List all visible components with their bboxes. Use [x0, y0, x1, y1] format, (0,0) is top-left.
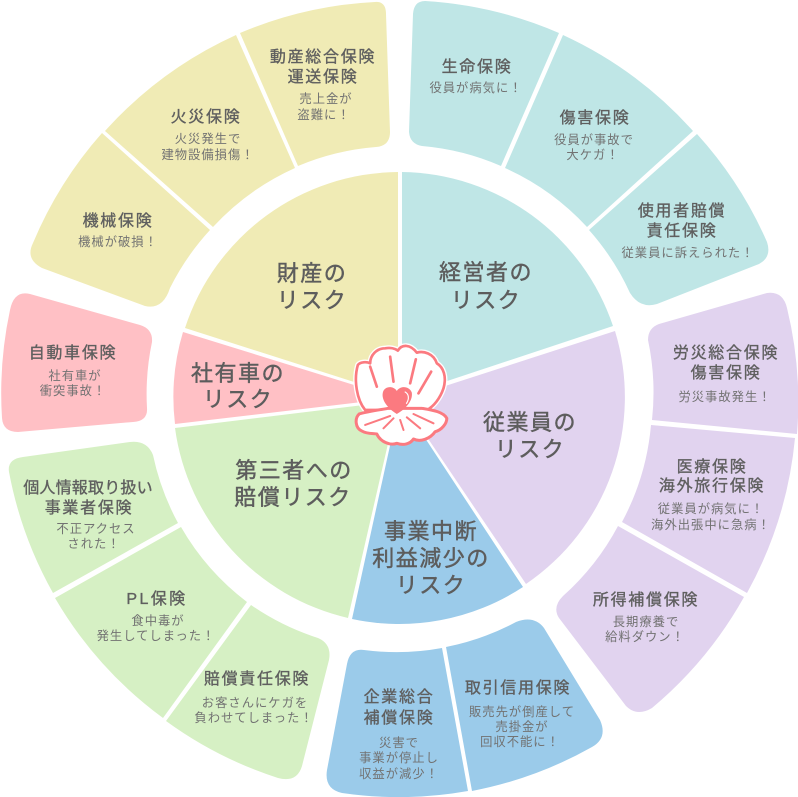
- panel: 医療保険・海外旅行保険: 従業員が病気に！: [658, 501, 764, 516]
- panel: 賠償責任保険: [166, 605, 330, 779]
- panel: 傷害保険: 傷害保険: [560, 108, 630, 126]
- panel: 所得補償保険: 長期療養で: [613, 614, 679, 629]
- segment: 従業員のリスク: リスク: [495, 436, 565, 462]
- panel: 企業総合補償保険: 災害で: [379, 735, 419, 750]
- panel: 個人情報取り扱い事業者保険: [9, 442, 178, 593]
- panel: 労災総合保険・傷害保険: 労災総合保険: [673, 344, 779, 362]
- icon: pearl shell with heart: [356, 346, 447, 444]
- panel: 企業総合補償保険: 収益が減少！: [359, 766, 439, 781]
- panel: 企業総合補償保険: 企業総合: [364, 688, 434, 706]
- panel: 企業総合補償保険: 補償保険: [364, 708, 434, 726]
- panel: 個人情報取り扱い事業者保険: された！: [67, 537, 121, 551]
- panel: 所得補償保険: 所得補償保険: [593, 590, 699, 608]
- panel: 傷害保険: [505, 35, 693, 227]
- segment: 経営者のリスク: リスク: [451, 288, 521, 312]
- panel: 自動車保険: 衝突事故！: [40, 383, 106, 398]
- segment: 事業中断・利益減少のリスク: 利益減少の: [372, 546, 490, 570]
- segment: 従業員のリスク: 従業員の: [483, 410, 577, 434]
- panel: 火災保険: 火災保険: [171, 108, 241, 126]
- panel: 使用者賠償責任保険: 使用者賠償: [638, 202, 726, 220]
- panel: 労災総合保険・傷害保険: 傷害保険: [691, 364, 761, 382]
- panel: PL保険: PL保険: [126, 590, 188, 608]
- panel: 企業総合補償保険: [327, 648, 468, 797]
- panel: 使用者賠償責任保険: [589, 134, 768, 305]
- segment: 経営者のリスク: 経営者の: [439, 260, 533, 284]
- panel: 労災総合保険・傷害保険: [648, 293, 798, 434]
- panel: 個人情報取り扱い事業者保険: 不正アクセス: [56, 522, 136, 536]
- icon part: upper shell: [356, 346, 445, 410]
- panel: 火災保険: 建物設備損傷！: [161, 147, 255, 162]
- segment: 社有車のリスク: 社有車の: [191, 360, 285, 386]
- panel: 生命保険: [409, 1, 559, 166]
- panel: 機械保険: [30, 133, 210, 307]
- panel: PL保険: 発生してしまった！: [97, 629, 215, 643]
- icon part: lower shell: [356, 408, 447, 444]
- panel: 所得補償保険: 給料ダウン！: [605, 629, 685, 644]
- segment: 第三者への賠償リスク: [175, 400, 398, 618]
- panel: 動産総合保険・運送保険: 運送保険: [288, 68, 358, 86]
- panel: 所得補償保険: [556, 526, 744, 712]
- panel: 個人情報取り扱い事業者保険: 個人情報取り扱い: [23, 478, 153, 496]
- segment: 第三者への賠償リスク: 賠償リスク: [234, 484, 352, 510]
- panel: 自動車保険: 自動車保険: [29, 344, 117, 362]
- panel: 生命保険: 生命保険: [442, 58, 512, 76]
- panel: 賠償責任保険: 賠償責任保険: [204, 670, 310, 688]
- panel: 労災総合保険・傷害保険: 労災事故発生！: [678, 389, 772, 404]
- icon part: heart pearl: [383, 387, 412, 414]
- segment: 第三者への賠償リスク: 第三者への: [235, 458, 353, 482]
- panel: 火災保険: [105, 35, 295, 227]
- segment: 経営者のリスク: [402, 172, 613, 396]
- segment: 社有車のリスク: リスク: [203, 386, 273, 412]
- panel: 動産総合保険・運送保険: [240, 2, 390, 166]
- panel: 自動車保険: [1, 293, 152, 432]
- panel: PL保険: 食中毒が: [131, 613, 185, 628]
- segment: 従業員のリスク: [402, 331, 625, 584]
- panel: 賠償責任保険: 負わせてしまった！: [194, 711, 314, 725]
- segment: 財産のリスク: 財産の: [277, 260, 347, 286]
- panel: 使用者賠償責任保険: 責任保険: [647, 222, 717, 240]
- panel: 火災保険: 火災発生で: [175, 132, 241, 146]
- panel: 個人情報取り扱い事業者保険: 事業者保険: [45, 498, 133, 516]
- panel: 取引信用保険: 売掛金が: [495, 719, 549, 734]
- segment: 社有車のリスク: [173, 332, 396, 424]
- panel: 機械保険: 機械保険: [83, 212, 153, 230]
- panel: 動産総合保険・運送保険: 売上金が: [299, 91, 353, 106]
- panel: 取引信用保険: [446, 620, 603, 791]
- segment: 財産のリスク: リスク: [277, 288, 347, 312]
- panel: 医療保険・海外旅行保険: 海外出張中に急病！: [651, 517, 771, 532]
- panel: 取引信用保険: 取引信用保険: [465, 678, 571, 696]
- panel: 機械保険: 機械が破損！: [78, 234, 158, 249]
- panel: 傷害保険: 役員が事故で: [554, 132, 634, 147]
- segment: 財産のリスク: [185, 172, 398, 396]
- segment: 事業中断・利益減少のリスク: 事業中断: [384, 518, 478, 544]
- panel: 医療保険・海外旅行保険: 海外旅行保険: [659, 476, 765, 494]
- panel: 自動車保険: 社有車が: [48, 368, 102, 383]
- panel: 動産総合保険・運送保険: 盗難に！: [297, 107, 351, 122]
- panel: 傷害保険: 大ケガ！: [566, 148, 620, 162]
- panel: 取引信用保険: 回収不能に！: [480, 734, 560, 749]
- panel: 医療保険・海外旅行保険: [622, 425, 795, 593]
- panel: 企業総合補償保険: 事業が停止し: [359, 750, 439, 765]
- panel: 生命保険: 役員が病気に！: [429, 80, 523, 95]
- panel: 動産総合保険・運送保険: 動産総合保険: [270, 48, 376, 66]
- panel: PL保険: [55, 527, 247, 718]
- segment: 事業中断・利益減少のリスク: [352, 400, 523, 624]
- panel: 使用者賠償責任保険: 従業員に訴えられた！: [622, 245, 754, 260]
- panel: 賠償責任保険: お客さんにケガを: [202, 696, 308, 710]
- segment: 事業中断・利益減少のリスク: リスク: [396, 572, 466, 598]
- panel: 医療保険・海外旅行保険: 医療保険: [677, 458, 747, 476]
- panel: 取引信用保険: 販売先が倒産して: [469, 704, 575, 719]
